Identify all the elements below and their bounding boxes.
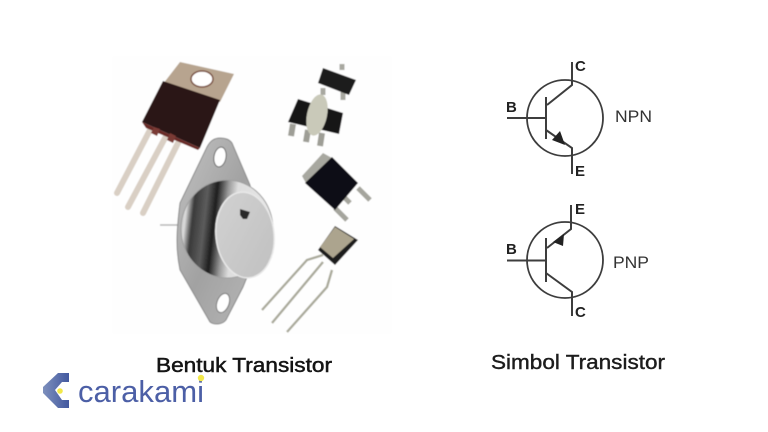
symbol: NPN transistor: NPN (615, 107, 652, 126)
heading: Bentuk Transistor: Bentuk Transistor (156, 355, 332, 377)
symbol: PNP transistor: E (575, 201, 585, 218)
icon: carakami C mark (43, 373, 69, 408)
photo: DPAK transistor (302, 153, 370, 220)
photo: SOT-23 transistor (318, 64, 356, 100)
heading: Simbol Transistor: Simbol Transistor (491, 352, 665, 374)
photo panel: transistor shapes (112, 56, 392, 334)
symbol: PNP transistor: PNP (613, 253, 649, 272)
symbol: NPN transistor: E (575, 163, 585, 180)
photo: TO-92 transistor (262, 226, 358, 332)
photo: TO-3 metal transistor (160, 138, 278, 324)
icon: yellow dot (198, 375, 204, 381)
symbol: NPN transistor (506, 58, 652, 180)
symbol: NPN transistor: C (575, 58, 586, 75)
symbol: NPN transistor: B (506, 99, 517, 116)
symbol: PNP transistor (506, 201, 649, 321)
logo: carakami (43, 373, 204, 409)
symbol: PNP transistor: C (575, 304, 586, 321)
photo: TO-220 transistor (117, 62, 234, 213)
symbol: PNP transistor: B (506, 241, 517, 258)
wordmark: carakami: carakami (78, 374, 204, 409)
photo: SOT-89 transistor (288, 92, 343, 146)
